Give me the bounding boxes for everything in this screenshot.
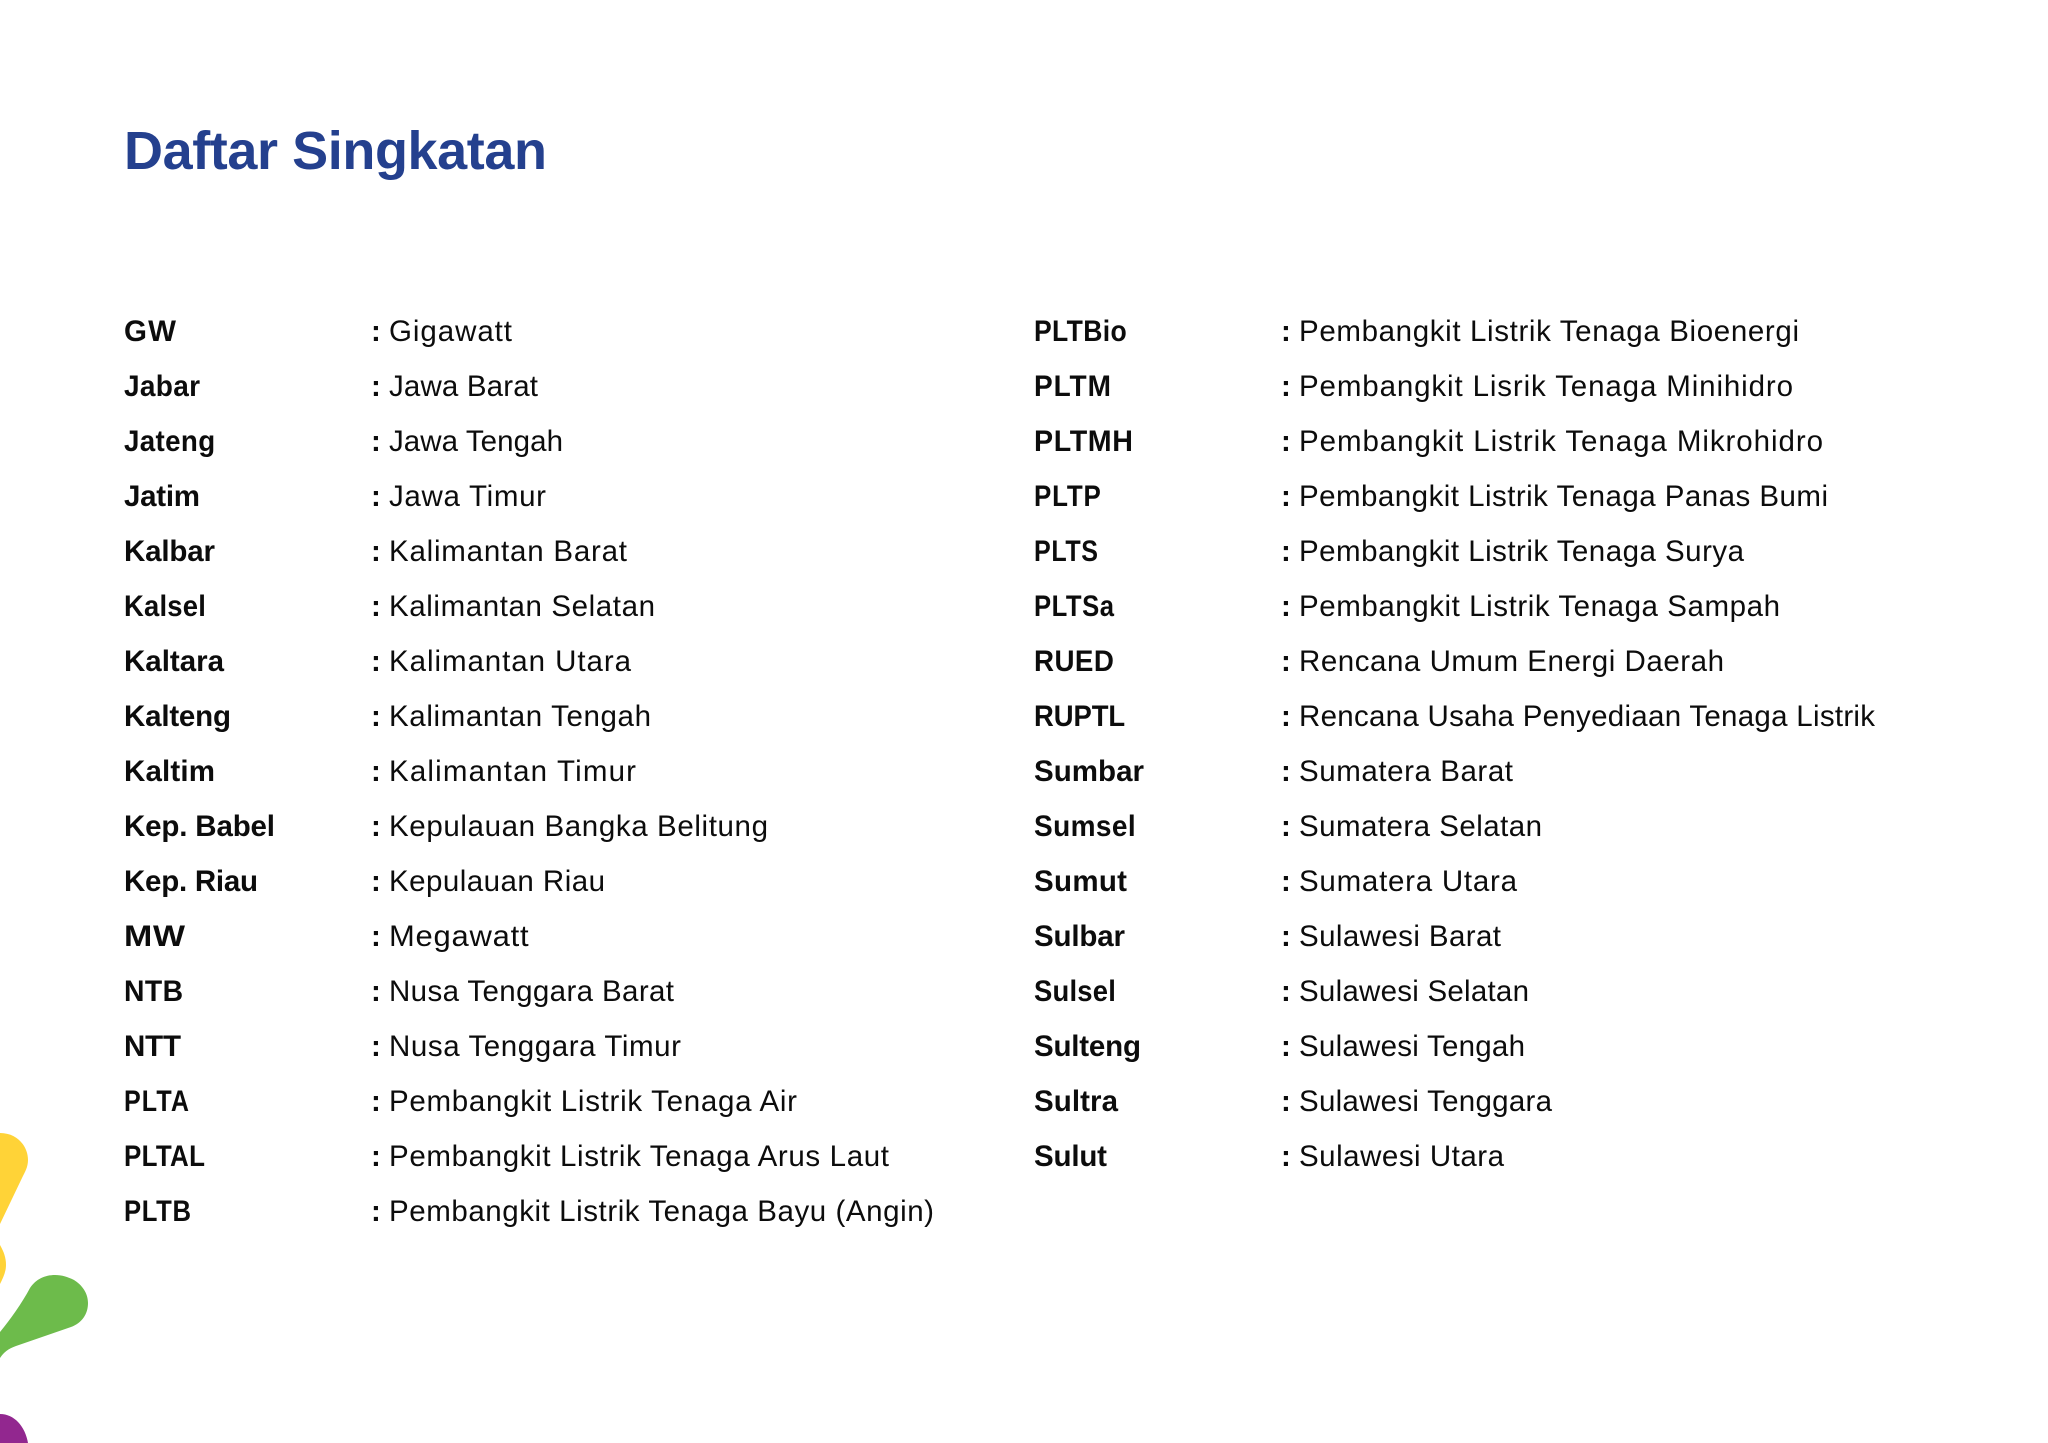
- row: RUED: RUED: [1034, 645, 1114, 678]
- row: PLTMH: Pembangkit Listrik Tenaga Mikrohidro: [1299, 425, 1823, 458]
- row: PLTS: PLTS: [1034, 534, 1098, 567]
- row: PLTA: :: [371, 1085, 381, 1118]
- row: Sulsel: Sulawesi Selatan: [1299, 975, 1529, 1008]
- row: Kep. Babel: [124, 810, 768, 843]
- row: GW: GW: [124, 315, 176, 348]
- row: Jateng: [124, 425, 563, 458]
- row: NTT: :: [371, 1030, 381, 1063]
- row: Kep. Babel: Kep. Babel: [124, 810, 275, 843]
- row: MW: :: [371, 920, 381, 953]
- row: Kalsel: Kalimantan Selatan: [389, 590, 655, 623]
- row: Kaltara: :: [371, 645, 381, 678]
- row: Kalteng: :: [371, 700, 381, 733]
- row: NTB: NTB: [124, 975, 183, 1008]
- row: PLTAL: PLTAL: [124, 1139, 205, 1172]
- row: PLTA: [124, 1084, 797, 1118]
- row: Sumut: [1034, 865, 1518, 898]
- row: Kaltara: Kalimantan Utara: [389, 645, 632, 678]
- row: Kep. Riau: Kep. Riau: [124, 865, 258, 898]
- row: PLTB: PLTB: [124, 1194, 191, 1227]
- row: PLTBio: PLTBio: [1034, 315, 1127, 347]
- row: PLTSa: :: [1281, 590, 1291, 623]
- row: PLTB: Pembangkit Listrik Tenaga Bayu (Angin): [389, 1195, 934, 1228]
- row: Kep. Riau: :: [371, 865, 381, 898]
- row: PLTS: Pembangkit Listrik Tenaga Surya: [1299, 535, 1745, 568]
- row: PLTBio: [1034, 315, 1799, 348]
- row: PLTAL: Pembangkit Listrik Tenaga Arus Laut: [389, 1140, 889, 1173]
- row: RUPTL: RUPTL: [1034, 700, 1125, 733]
- row: Sumbar: Sumbar: [1034, 755, 1145, 788]
- row: PLTM: Pembangkit Lisrik Tenaga Minihidro: [1299, 370, 1793, 403]
- row: Sumbar: :: [1281, 755, 1291, 788]
- row: NTT: [124, 1030, 681, 1063]
- title: Daftar Singkatan: [124, 121, 547, 181]
- row: Kaltim: Kalimantan Timur: [389, 755, 636, 788]
- row: Jatim: Jawa Timur: [389, 480, 546, 513]
- row: Sulsel: [1034, 975, 1529, 1008]
- row: PLTP: :: [1281, 480, 1291, 513]
- row: Kalbar: Kalimantan Barat: [389, 535, 627, 568]
- row: MW: [124, 919, 529, 953]
- row: Sulbar: :: [1281, 920, 1291, 953]
- row: RUED: [1034, 645, 1724, 678]
- row: Kep. Babel: Kepulauan Bangka Belitung: [389, 810, 768, 843]
- row: Kalbar: Kalbar: [124, 535, 216, 568]
- row: Sulsel: Sulsel: [1034, 975, 1116, 1008]
- row: RUED: Rencana Umum Energi Daerah: [1299, 645, 1724, 678]
- row: Sulteng: :: [1281, 1030, 1291, 1063]
- row: Kaltara: Kaltara: [124, 645, 225, 678]
- row: PLTS: [1034, 534, 1745, 568]
- row: PLTAL: [124, 1139, 889, 1173]
- row: Kalteng: [124, 700, 651, 733]
- row: Jateng: Jawa Tengah: [389, 425, 563, 458]
- row: PLTSa: Pembangkit Listrik Tenaga Sampah: [1299, 590, 1780, 623]
- row: PLTM: PLTM: [1034, 370, 1111, 403]
- row: Kalsel: [124, 590, 655, 623]
- row: Sulbar: Sulbar: [1034, 920, 1126, 953]
- row: PLTMH: [1034, 425, 1823, 458]
- row: PLTS: :: [1281, 535, 1291, 568]
- row: RUPTL: :: [1281, 700, 1291, 733]
- decorative petals: [0, 1133, 88, 1443]
- row: PLTM: [1034, 370, 1793, 403]
- row: Kalbar: :: [371, 535, 381, 568]
- row: Sulbar: Sulawesi Barat: [1299, 920, 1501, 953]
- row: Sulut: Sulut: [1034, 1140, 1107, 1173]
- row: Kaltim: :: [371, 755, 381, 788]
- row: Sulteng: Sulteng: [1034, 1030, 1141, 1063]
- row: PLTSa: [1034, 589, 1780, 623]
- row: Sulut: Sulawesi Utara: [1299, 1140, 1505, 1173]
- row: Sumsel: :: [1281, 810, 1291, 843]
- row: GW: [124, 315, 512, 348]
- row: Sulteng: [1034, 1030, 1525, 1063]
- row: Sumsel: Sumatera Selatan: [1299, 810, 1542, 843]
- row: Sumut: Sumut: [1034, 865, 1127, 898]
- row: MW: Megawatt: [389, 921, 529, 953]
- row: Kep. Riau: Kepulauan Riau: [389, 865, 605, 898]
- row: RUPTL: Rencana Usaha Penyediaan Tenaga Listrik: [1299, 700, 1875, 733]
- row: Sumsel: [1034, 810, 1542, 843]
- row: PLTAL: :: [371, 1140, 381, 1173]
- row: GW: Gigawatt: [389, 315, 512, 348]
- left column: abbreviations GW to PLTB: [124, 315, 934, 1228]
- row: Sumut: Sumatera Utara: [1299, 865, 1518, 898]
- row: Kalbar: [124, 535, 627, 568]
- row: PLTP: PLTP: [1034, 479, 1101, 512]
- row: PLTBio: :: [1281, 315, 1291, 348]
- row: PLTA: PLTA: [124, 1084, 189, 1117]
- row: Jabar: [124, 370, 538, 403]
- row: Jatim: Jatim: [124, 480, 200, 513]
- row: Sulsel: :: [1281, 975, 1291, 1008]
- row: PLTP: [1034, 479, 1828, 513]
- row: PLTM: :: [1281, 370, 1291, 403]
- row: Kalteng: Kalteng: [124, 700, 231, 733]
- row: PLTB: :: [371, 1195, 381, 1228]
- row: PLTBio: Pembangkit Listrik Tenaga Bioenergi: [1299, 315, 1799, 348]
- row: Kaltim: [124, 755, 636, 788]
- row: Kaltim: Kaltim: [124, 755, 215, 788]
- row: Sultra: :: [1281, 1085, 1291, 1118]
- row: NTB: :: [371, 975, 381, 1008]
- row: NTT: Nusa Tenggara Timur: [389, 1030, 681, 1063]
- row: PLTA: Pembangkit Listrik Tenaga Air: [389, 1085, 797, 1118]
- row: Kep. Riau: [124, 865, 605, 898]
- row: Sulteng: Sulawesi Tengah: [1299, 1030, 1525, 1063]
- row: Sumbar: Sumatera Barat: [1299, 755, 1513, 788]
- row: PLTSa: PLTSa: [1034, 589, 1115, 622]
- row: PLTP: Pembangkit Listrik Tenaga Panas Bumi: [1299, 480, 1828, 513]
- row: NTB: [124, 975, 674, 1008]
- row: Jateng: Jateng: [124, 425, 215, 458]
- row: Jatim: [124, 480, 546, 513]
- row: Sulbar: [1034, 920, 1501, 953]
- row: Sultra: Sulawesi Tenggara: [1299, 1085, 1553, 1118]
- row: Sultra: Sultra: [1034, 1085, 1119, 1118]
- row: Kalteng: Kalimantan Tengah: [389, 700, 651, 733]
- row: RUPTL: [1034, 700, 1875, 733]
- row: Sumut: :: [1281, 865, 1291, 898]
- row: Kep. Babel: :: [371, 810, 381, 843]
- row: Jabar: Jabar: [124, 370, 200, 403]
- row: Jatim: :: [371, 480, 381, 513]
- row: Kalsel: :: [371, 590, 381, 623]
- row: Sumsel: Sumsel: [1034, 810, 1136, 843]
- row: GW: :: [371, 315, 381, 348]
- row: Jabar: Jawa Barat: [389, 370, 538, 403]
- row: RUED: :: [1281, 645, 1291, 678]
- row: MW: MW: [124, 919, 185, 952]
- row: Jabar: :: [371, 370, 381, 403]
- row: Sultra: [1034, 1085, 1553, 1118]
- row: Sulut: [1034, 1140, 1505, 1173]
- row: NTB: Nusa Tenggara Barat: [389, 975, 674, 1008]
- row: PLTMH: PLTMH: [1034, 426, 1133, 458]
- row: Sumbar: [1034, 755, 1513, 788]
- row: Jateng: :: [371, 425, 381, 458]
- row: NTT: NTT: [124, 1030, 181, 1063]
- right column: abbreviations PLTBio to Sulut: [1034, 315, 1875, 1173]
- row: Kaltara: [124, 645, 632, 678]
- row: PLTB: [124, 1194, 934, 1228]
- row: PLTMH: :: [1281, 425, 1291, 458]
- row: Kalsel: Kalsel: [124, 590, 206, 623]
- row: Sulut: :: [1281, 1140, 1291, 1173]
